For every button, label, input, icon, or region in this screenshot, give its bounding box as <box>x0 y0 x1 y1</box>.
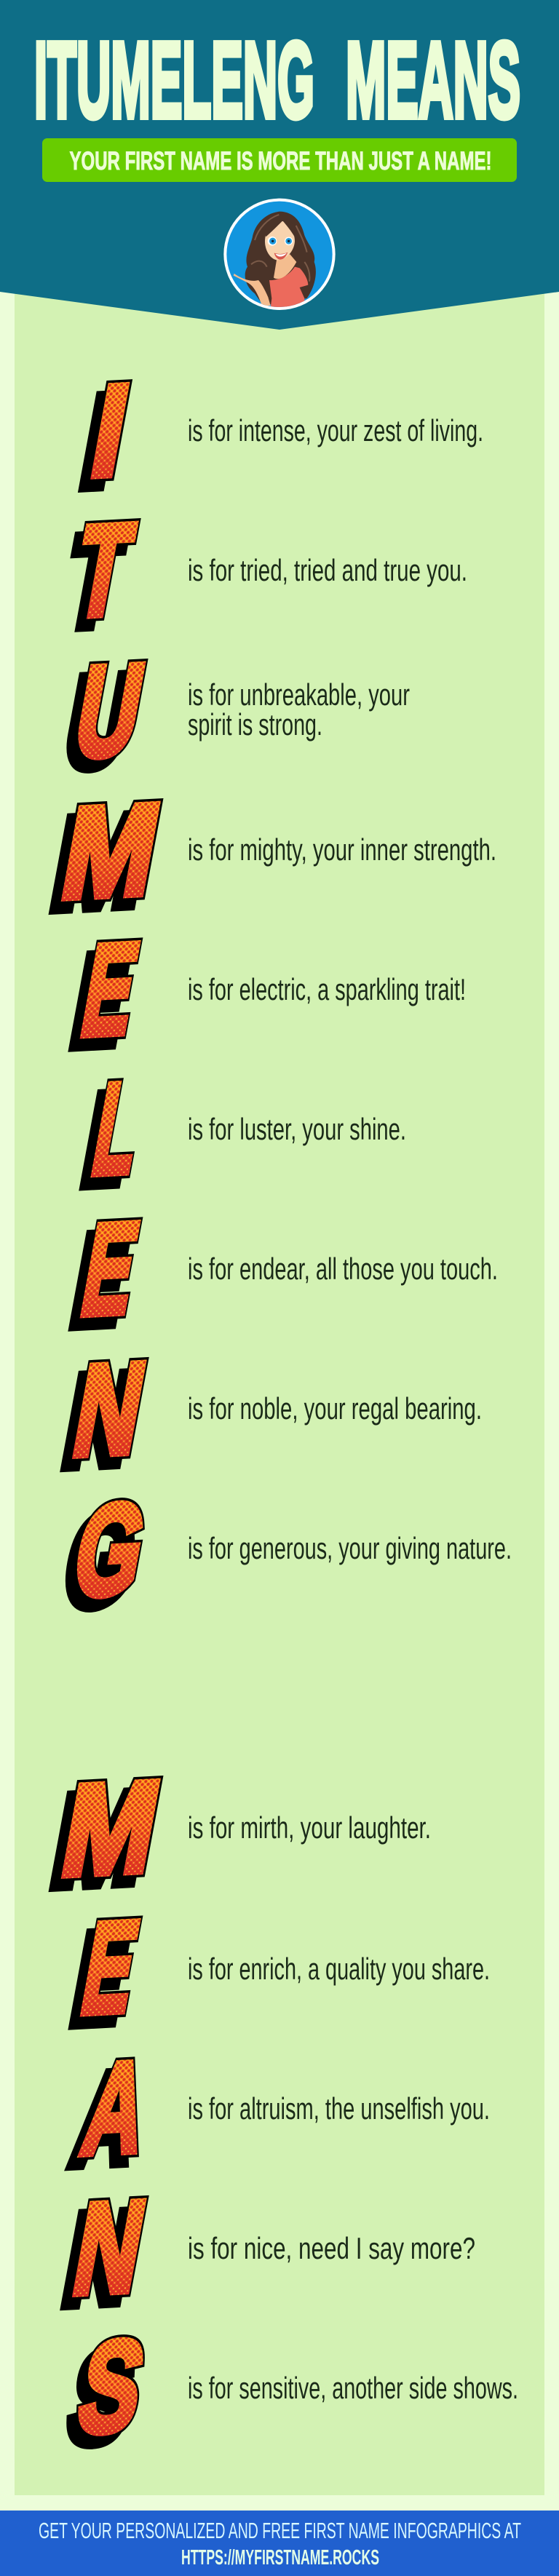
letter E: E <box>73 1196 148 1343</box>
letter E: E <box>73 1895 148 2041</box>
letter I: I <box>82 358 138 504</box>
letter T: T <box>55 508 132 655</box>
letter N: N <box>54 1347 145 1494</box>
letter G: G <box>64 1476 156 1624</box>
letter E: E <box>73 917 148 1063</box>
letter T: T <box>66 497 142 644</box>
letter A: A <box>74 2035 158 2182</box>
letter A: A <box>74 2035 158 2182</box>
row: I <box>71 358 483 514</box>
letter M: M <box>52 1754 170 1904</box>
letter E: E <box>73 917 148 1063</box>
row: T <box>55 497 467 655</box>
letter E: E <box>73 1895 148 2041</box>
letter A: A <box>63 2046 148 2193</box>
letter N: N <box>64 1336 155 1484</box>
letter E: E <box>73 1196 148 1343</box>
letter E: E <box>63 927 138 1074</box>
letter L: L <box>84 1056 151 1202</box>
row: S <box>59 2313 518 2471</box>
letter E: E <box>63 1206 138 1353</box>
text: L meaning: is for luster, your shine. <box>188 1112 406 1146</box>
letter U: U <box>55 648 143 795</box>
letter S: S <box>68 2313 154 2461</box>
icon: avatar portrait <box>223 199 336 310</box>
letter S: S <box>68 2313 154 2461</box>
row: N <box>54 2174 475 2332</box>
letter E: E <box>73 1895 148 2041</box>
letter N: N <box>64 1336 155 1484</box>
letter U: U <box>66 637 154 785</box>
text: U meaning: spirit is strong. <box>188 707 322 742</box>
row: E <box>63 1895 490 2052</box>
text: U meaning: is for unbreakable, your <box>188 677 410 712</box>
letter I: I <box>82 358 138 504</box>
letter N: N <box>64 2174 155 2322</box>
row: L <box>74 1056 406 1213</box>
row: M <box>42 1754 431 1914</box>
letter M: M <box>42 788 159 937</box>
letter M: M <box>52 1754 170 1904</box>
letter M: M <box>42 1765 159 1914</box>
letter M: M <box>52 777 170 926</box>
text: M meaning: is for mirth, your laughter. <box>188 1810 431 1845</box>
row: U <box>55 637 410 795</box>
letter T: T <box>66 497 142 644</box>
footer url: HTTPS://MYFIRSTNAME.ROCKS <box>181 2546 379 2569</box>
letter I: I <box>82 358 138 504</box>
letter M: M <box>52 777 170 926</box>
letter L: L <box>84 1056 151 1202</box>
row: E <box>63 1196 498 1353</box>
row: E <box>63 917 466 1074</box>
letter G: G <box>55 1487 146 1634</box>
row: M <box>42 777 496 937</box>
letter L: L <box>84 1056 151 1202</box>
letter E: E <box>73 1196 148 1343</box>
text: U meaning <box>188 677 410 742</box>
header banner <box>0 0 559 330</box>
subtitle banner <box>42 138 517 182</box>
letter M: M <box>52 777 170 926</box>
row: N <box>54 1336 482 1494</box>
letter N: N <box>64 2174 155 2322</box>
letter L: L <box>74 1066 141 1213</box>
letter U: U <box>66 637 154 785</box>
letter E: E <box>73 917 148 1063</box>
row: G <box>55 1476 512 1634</box>
letter G: G <box>64 1476 156 1624</box>
letter S: S <box>59 2324 144 2471</box>
letter G: G <box>64 1476 156 1624</box>
letter I: I <box>71 369 129 514</box>
letter M: M <box>52 1754 170 1904</box>
letter N: N <box>64 2174 155 2322</box>
letter S: S <box>68 2313 154 2461</box>
letter E: E <box>63 1905 138 2052</box>
letter T: T <box>66 497 142 644</box>
footer bar <box>0 2511 559 2576</box>
letter A: A <box>74 2035 158 2182</box>
letter N: N <box>64 1336 155 1484</box>
letter N: N <box>54 2185 145 2332</box>
letter U: U <box>66 637 154 785</box>
row: A <box>63 2035 490 2193</box>
